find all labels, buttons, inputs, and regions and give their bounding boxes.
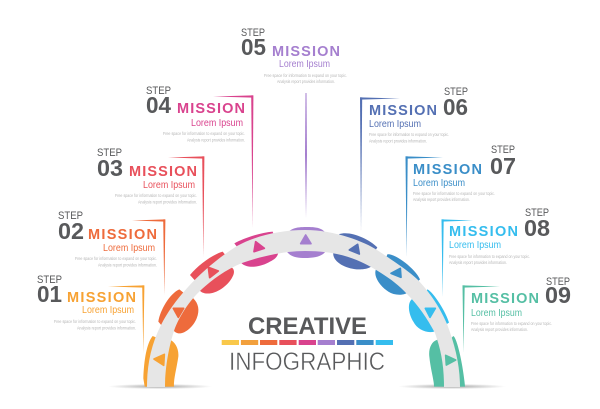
panel: step 01: STEP: [37, 274, 62, 286]
title: CREATIVE: [248, 313, 367, 340]
panel: step 09: Analysis report provides information.: [471, 327, 528, 332]
colour bar: [222, 340, 393, 345]
ground shadows: [108, 384, 506, 389]
panel: step 08: 08: [524, 215, 550, 241]
panel: step 04: MISSION: [177, 101, 245, 117]
panel: step 02: Analysis report provides information.: [98, 262, 157, 268]
panel: step 08: Analysis report provides information.: [449, 260, 507, 265]
panel: step 01: [37, 274, 144, 353]
panel: step 04: STEP: [146, 85, 171, 97]
panel: step 04: Free space for information to expand on your topic.: [163, 131, 245, 136]
frame line 08: [442, 219, 473, 297]
frame line 02: [132, 219, 165, 295]
panel: step 08: Free space for information to expand on your topic.: [449, 254, 530, 259]
panel: step 03: [97, 147, 204, 257]
panel: step 03: Lorem Ipsum: [143, 180, 195, 191]
panel: step 05: MISSION: [272, 44, 340, 60]
panel: step 07: [406, 144, 516, 257]
panel: step 06: MISSION: [369, 103, 437, 119]
panel: step 06: [360, 86, 468, 232]
panel: step 03: 03: [97, 155, 123, 181]
panel: step 03: Free space for information to expand on your topic.: [115, 193, 197, 198]
panel: step 02: [58, 210, 165, 295]
panel: step 02: STEP: [58, 210, 83, 222]
panel: step 04: Analysis report provides information.: [187, 138, 245, 142]
panel: step 03: Analysis report provides information.: [138, 200, 197, 204]
arch diagram: [143, 227, 465, 387]
panel: step 05: [241, 27, 347, 218]
panel: step 06: STEP: [444, 86, 468, 98]
panel: step 01: MISSION: [67, 290, 136, 306]
panel: step 09: MISSION: [471, 291, 539, 307]
frame line 04: [213, 95, 253, 228]
panel: step 06: Analysis report provides information.: [369, 138, 427, 144]
panel: step 08: Lorem Ipsum: [449, 240, 501, 251]
arch arrows right: [301, 235, 456, 365]
title: [222, 313, 393, 376]
panel: step 01: 01: [37, 281, 62, 307]
panel: step 08: STEP: [525, 207, 549, 219]
panel: step 07: Analysis report provides information.: [413, 197, 470, 202]
panel: step 05: Analysis report provides information.: [277, 79, 335, 84]
panel: step 07: Free space for information to expand on your topic.: [413, 191, 495, 196]
panel: step 09: Free space for information to expand on your topic.: [471, 321, 552, 326]
panel: step 06: 06: [443, 94, 468, 120]
panel: step 05: Lorem Ipsum: [279, 59, 330, 70]
arch band: [147, 230, 460, 387]
panel: step 09: STEP: [546, 276, 570, 288]
panel: step 01: Free space for information to expand on your topic.: [54, 319, 136, 324]
panel: step 04: [146, 85, 253, 228]
arch segment centre: [285, 227, 328, 258]
panel: step 02: Free space for information to expand on your topic.: [75, 256, 157, 261]
panel: step 03: MISSION: [129, 164, 197, 180]
panel: step 08: [442, 207, 550, 297]
panel: step 01: Lorem Ipsum: [82, 305, 134, 316]
panel: step 02: MISSION: [88, 227, 157, 243]
panel: step 05: 05: [241, 34, 266, 60]
panel: step 01: Analysis report provides information.: [77, 326, 136, 330]
panel: step 05: STEP: [241, 27, 265, 39]
frame line 01: [108, 285, 144, 353]
panel: step 08: MISSION: [449, 224, 518, 240]
panel: step 06: Free space for information to expand on your topic.: [369, 132, 449, 137]
frame line 03: [168, 156, 204, 257]
frame line 05: [305, 93, 307, 218]
panel: step 06: Lorem Ipsum: [369, 119, 421, 130]
panel: step 07: Lorem Ipsum: [413, 178, 465, 189]
panel: step 09: Lorem Ipsum: [471, 308, 522, 319]
panel: step 03: STEP: [97, 147, 122, 159]
panel: step 09: [462, 276, 571, 353]
panel: step 07: 07: [490, 153, 516, 179]
frame line 06: [360, 97, 400, 232]
panel: step 04: 04: [146, 92, 171, 118]
panel: step 07: MISSION: [413, 162, 482, 178]
frame line 07: [406, 156, 443, 257]
arch segments right: [333, 233, 465, 387]
panel: step 09: 09: [545, 282, 571, 308]
arch arrows left: [154, 242, 264, 365]
panel: step 07: STEP: [491, 144, 515, 156]
panel: step 04: Lorem Ipsum: [191, 118, 243, 129]
panel: step 02: 02: [58, 218, 84, 244]
arch segments left: [143, 232, 279, 387]
frame line 09: [462, 285, 500, 353]
title: INFOGRAPHIC: [229, 348, 385, 376]
panel: step 02: Lorem Ipsum: [103, 243, 155, 254]
panel: step 05: Free space for information to expand on your topic.: [264, 73, 347, 78]
